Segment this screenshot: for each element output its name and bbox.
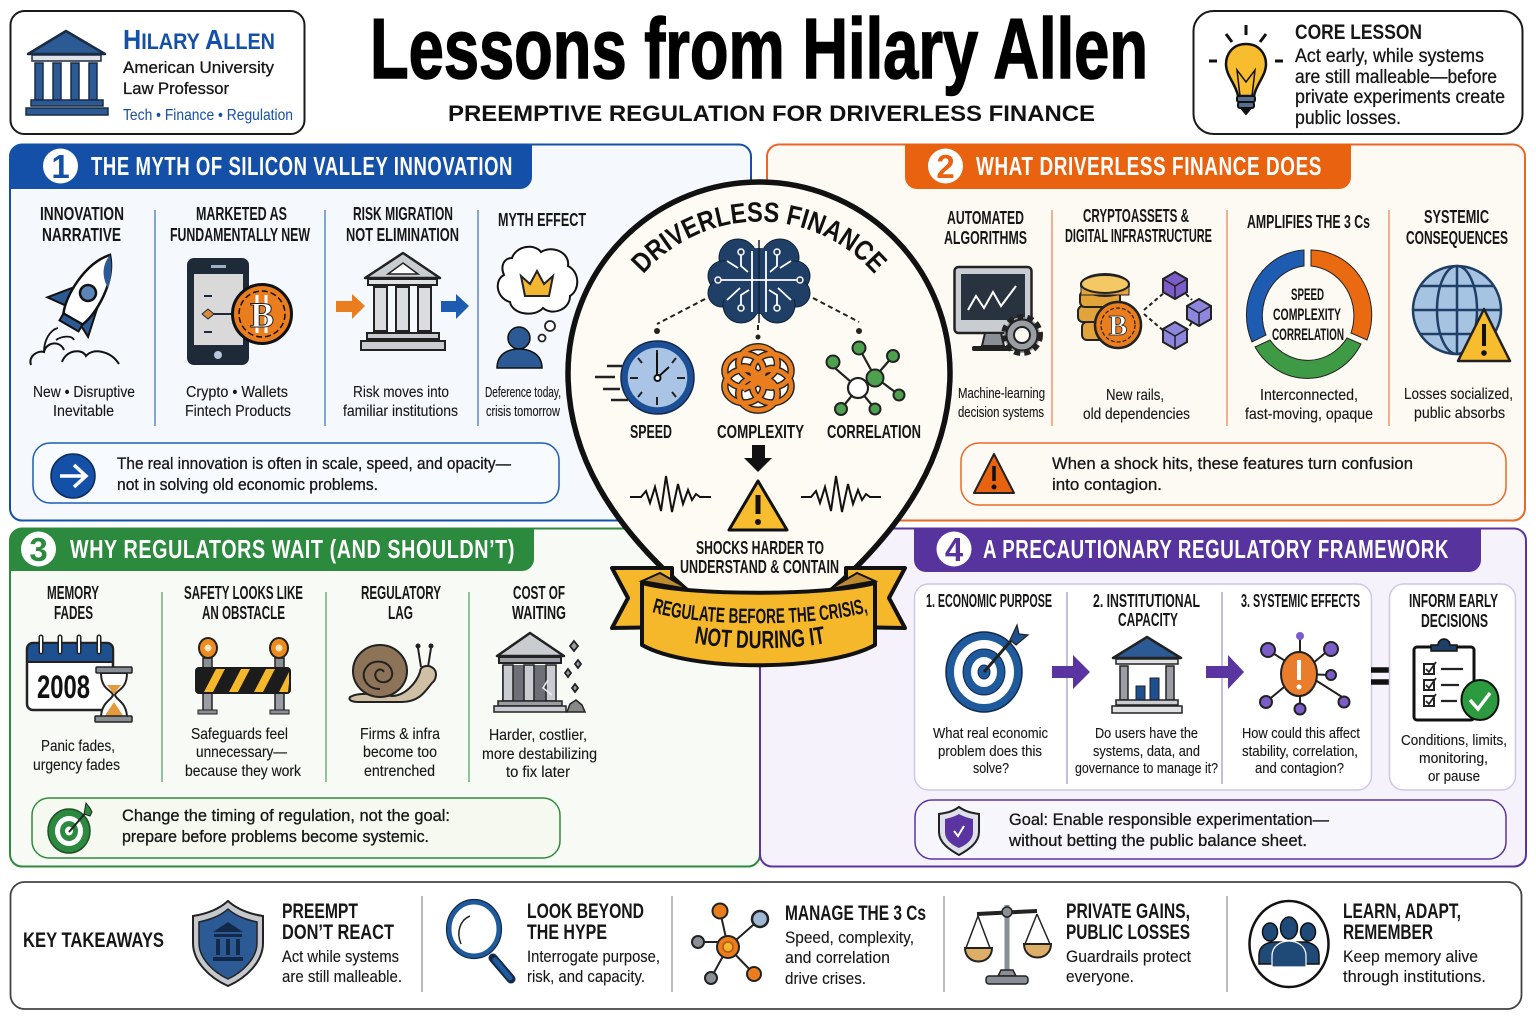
- column: myth effect: crisis tomorrow: [486, 404, 560, 420]
- step: economic purpose: problem does this: [938, 743, 1042, 760]
- column: innovation narrative: NARRATIVE: [42, 225, 121, 245]
- step: economic purpose: What real economic: [933, 725, 1048, 742]
- column: amplifies the 3 Cs: [1245, 212, 1373, 423]
- step: economic purpose: 1. ECONOMIC PURPOSE: [926, 591, 1052, 611]
- icon: snail: [349, 644, 436, 702]
- arrow: down to warning: [744, 445, 772, 472]
- takeaway: look beyond the hype: THE HYPE: [527, 921, 607, 944]
- column: cost of waiting: more destabilizing: [482, 746, 597, 763]
- chart: 3 Cs donut: CORRELATION: [1272, 325, 1344, 344]
- icon: green target: [48, 803, 92, 853]
- takeaway: learn adapt remember: through institutions.: [1343, 967, 1486, 986]
- key takeaways label: KEY TAKEAWAYS: [23, 929, 164, 952]
- author topics: Tech • Finance • Regulation: [123, 107, 293, 124]
- subtitle: PREEMPTIVE REGULATION FOR DRIVERLESS FINANCE: [448, 101, 1095, 126]
- column: regulatory lag: become too: [363, 744, 437, 761]
- column: automated algorithms: decision systems: [958, 405, 1044, 421]
- box: inform early decisions: Conditions, limits,: [1401, 732, 1507, 749]
- takeaway: manage the 3 Cs: [692, 902, 926, 988]
- step: economic purpose: [926, 591, 1052, 777]
- takeaway: private gains public losses: Guardrails protect: [1066, 947, 1191, 966]
- author role: [123, 58, 274, 98]
- icon: coins and blocks: [1078, 272, 1211, 349]
- icon: speed clock: [595, 341, 694, 414]
- column: risk migration: RISK MIGRATION: [353, 204, 453, 224]
- core lesson text: Act early, while systems: [1295, 46, 1484, 67]
- takeaway: private gains public losses: PUBLIC LOSSES: [1066, 921, 1190, 944]
- column: systemic consequences: [1404, 207, 1513, 422]
- panel 1 header: [10, 144, 532, 189]
- arrow: step 2 to 3: [1206, 655, 1244, 689]
- step: systemic effects: stability, correlation,: [1242, 743, 1358, 760]
- column: marketed as new: FUNDAMENTALLY NEW: [170, 225, 310, 245]
- panel: 1 the myth of silicon valley innovation: [10, 144, 751, 520]
- takeaway: look beyond the hype: LOOK BEYOND: [527, 900, 644, 923]
- column: automated algorithms: AUTOMATED: [947, 208, 1024, 228]
- icon: correlation network: [826, 342, 904, 415]
- column: cryptoassets: DIGITAL INFRASTRUCTURE: [1065, 226, 1212, 246]
- takeaway: manage the 3 Cs: drive crises.: [785, 969, 866, 988]
- icon: light bulb: [1209, 25, 1283, 114]
- step: institutional capacity: governance to manage it?: [1075, 760, 1218, 777]
- column: safety looks like an obstacle: [184, 583, 303, 780]
- icon: bank with bar chart: [1112, 637, 1182, 713]
- icon: clipboard with check: [1414, 639, 1498, 720]
- column: systemic consequences: public absorbs: [1414, 405, 1505, 422]
- icon: coins and blocks: B: [1109, 311, 1127, 342]
- column: safety looks like an obstacle: SAFETY LOOKS LIKE: [184, 583, 303, 603]
- callout: change the timing: [32, 798, 560, 858]
- step: institutional capacity: CAPACITY: [1118, 610, 1178, 630]
- banner: regulate before the crisis: REGULATE BEFORE THE CRISIS,: [652, 598, 868, 624]
- takeaway: learn adapt remember: [1250, 900, 1486, 987]
- column: regulatory lag: LAG: [388, 603, 413, 623]
- column: marketed as new: Fintech Products: [185, 403, 291, 420]
- column: innovation narrative: [30, 204, 135, 420]
- panel: 3 why regulators wait: [10, 528, 760, 866]
- icon: purple shield: [939, 807, 979, 855]
- takeaway: learn adapt remember: Keep memory alive: [1343, 947, 1478, 966]
- panel 1 header: 1: [51, 148, 70, 185]
- step: institutional capacity: systems, data, and: [1093, 743, 1200, 760]
- framework steps box: [914, 584, 1372, 790]
- core lesson text: public losses.: [1295, 108, 1401, 129]
- step: systemic effects: How could this affect: [1242, 725, 1361, 742]
- shocks text: [680, 538, 839, 577]
- column: safety looks like an obstacle: AN OBSTACLE: [202, 603, 285, 623]
- column: marketed as new: [170, 204, 310, 420]
- arrow: step 1 to 2: [1052, 655, 1090, 689]
- center heading: DRIVERLESS FINANCE: [630, 202, 888, 274]
- takeaway: private gains public losses: everyone.: [1066, 967, 1134, 986]
- callout: shock contagion: into contagion.: [1052, 475, 1162, 494]
- icon: calendar and hourglass: [27, 637, 132, 722]
- center labels: SPEED: [630, 422, 672, 442]
- column: regulatory lag: [349, 583, 441, 780]
- center labels: CORRELATION: [827, 422, 921, 442]
- icon: magnifying glass: [446, 900, 511, 979]
- column: systemic consequences: Losses socialized,: [1404, 386, 1513, 403]
- takeaway: look beyond the hype: risk, and capacity.: [527, 967, 645, 986]
- callout: goal: without betting the public balance sheet.: [1008, 831, 1307, 850]
- callout: change the timing: prepare before problems become systemic.: [122, 827, 429, 846]
- core lesson text: are still malleable—before: [1295, 67, 1497, 88]
- step: institutional capacity: Do users have the: [1095, 725, 1198, 742]
- column: automated algorithms: Machine-learning: [958, 386, 1045, 402]
- icon: phone with bitcoin: [187, 258, 292, 365]
- takeaway: preempt: DON’T REACT: [282, 921, 394, 944]
- panel: key takeaways: [10, 882, 1522, 1009]
- column: cost of waiting: [482, 583, 597, 781]
- takeaway: preempt: Act while systems: [282, 947, 399, 966]
- icon: monitor with gear: [954, 267, 1040, 353]
- takeaway: manage the 3 Cs: MANAGE THE 3 Cs: [785, 902, 926, 925]
- callout: goal: [915, 800, 1506, 859]
- step: institutional capacity: [1075, 591, 1218, 777]
- callout: real innovation: [33, 443, 559, 503]
- column: myth effect: [485, 210, 586, 420]
- chart: 3 Cs donut: [1246, 250, 1372, 378]
- box: inform early decisions: [1390, 584, 1516, 790]
- takeaway: manage the 3 Cs: Speed, complexity,: [785, 928, 914, 947]
- icon: calendar and hourglass: 2008: [37, 669, 90, 705]
- panel 3 header: WHY REGULATORS WAIT (AND SHOULDN’T): [70, 534, 515, 564]
- icon: crumbling bank: [494, 633, 585, 712]
- icon: institution building: [26, 31, 108, 115]
- column: cryptoassets: [1065, 206, 1212, 423]
- column: safety looks like an obstacle: because they work: [185, 763, 302, 780]
- icon: bank with flow arrows: [336, 253, 469, 350]
- column: innovation narrative: Inevitable: [53, 403, 114, 420]
- author role: Law Professor: [123, 79, 229, 98]
- column: automated algorithms: ALGORITHMS: [944, 228, 1027, 248]
- icon: bank shield: [193, 901, 263, 986]
- box: inform early decisions: monitoring,: [1419, 750, 1488, 767]
- icon: orange network: [692, 904, 768, 984]
- column: memory fades: MEMORY: [47, 583, 99, 603]
- takeaway: learn adapt remember: LEARN, ADAPT,: [1343, 900, 1461, 923]
- step: systemic effects: [1241, 591, 1361, 777]
- chart: 3 Cs donut: COMPLEXITY: [1273, 305, 1341, 324]
- panel 4 header: [914, 528, 1481, 572]
- banner: regulate before the crisis: NOT DURING IT: [695, 626, 824, 648]
- panel: 4 a precautionary regulatory framework: [760, 528, 1526, 866]
- panel 3 header: [10, 528, 534, 571]
- takeaway: private gains public losses: PRIVATE GAINS,: [1066, 900, 1190, 923]
- shocks text: UNDERSTAND & CONTAIN: [680, 557, 839, 577]
- takeaway: private gains public losses: [965, 900, 1191, 986]
- title: Lessons from Hilary Allen: [370, 2, 1148, 97]
- column: innovation narrative: INNOVATION: [40, 204, 124, 224]
- panel: core lesson: [1194, 11, 1522, 134]
- panel 2 header: 2: [936, 148, 955, 185]
- column: cryptoassets: CRYPTOASSETS &: [1083, 206, 1189, 226]
- column: risk migration: [336, 204, 469, 420]
- icon: target with arrow: [946, 625, 1028, 712]
- takeaway: preempt: PREEMPT: [282, 900, 358, 923]
- takeaway: look beyond the hype: [446, 900, 660, 986]
- panel: central driverless finance balloon: [565, 179, 953, 668]
- column: myth effect: MYTH EFFECT: [498, 210, 586, 230]
- takeaway: learn adapt remember: REMEMBER: [1343, 921, 1433, 944]
- panel: author card: [10, 11, 304, 134]
- column: memory fades: Panic fades,: [41, 738, 115, 755]
- takeaway: preempt: [193, 900, 402, 986]
- takeaway: preempt: are still malleable.: [282, 967, 402, 986]
- box: inform early decisions: or pause: [1428, 768, 1480, 785]
- column: cryptoassets: old dependencies: [1083, 406, 1190, 423]
- column: regulatory lag: Firms & infra: [360, 726, 440, 743]
- column: regulatory lag: entrenched: [364, 763, 435, 780]
- banner: regulate before the crisis: [610, 566, 908, 668]
- column: automated algorithms: [944, 208, 1045, 421]
- icon: shock waves: [630, 476, 881, 512]
- author name: HILARY ALLEN: [123, 24, 275, 55]
- step: economic purpose: solve?: [973, 760, 1009, 777]
- column: risk migration: Risk moves into: [353, 384, 449, 401]
- column: memory fades: FADES: [54, 603, 93, 623]
- column: systemic consequences: SYSTEMIC: [1424, 207, 1489, 227]
- panel: 2 what driverless finance does: [767, 144, 1525, 520]
- panel 1 header: THE MYTH OF SILICON VALLEY INNOVATION: [91, 151, 513, 181]
- column: myth effect: Deference today,: [485, 385, 561, 401]
- icon: thought cloud and person: [497, 247, 577, 368]
- icon: road barrier: [195, 638, 291, 714]
- column: cost of waiting: COST OF: [513, 583, 565, 603]
- column: risk migration: NOT ELIMINATION: [346, 225, 459, 245]
- core lesson text: private experiments create: [1295, 87, 1505, 108]
- core lesson text: [1295, 21, 1505, 129]
- icon: globe with warning: [1413, 266, 1510, 361]
- callout: real innovation: The real innovation is often in scale, speed, and opacity—: [117, 454, 511, 473]
- callout: goal: Goal: Enable responsible experimentation—: [1009, 810, 1329, 829]
- icon: people circle: [1250, 901, 1328, 987]
- dashed connectors: [654, 298, 862, 340]
- panel 2 header: [905, 144, 1351, 189]
- icon: rocket: [30, 238, 129, 365]
- step: systemic effects: 3. SYSTEMIC EFFECTS: [1241, 591, 1360, 611]
- callout: shock contagion: When a shock hits, these features turn confusion: [1052, 454, 1413, 473]
- column: memory fades: [27, 583, 132, 774]
- takeaway: manage the 3 Cs: and correlation: [785, 948, 890, 967]
- equals sign: [1371, 670, 1391, 682]
- column: marketed as new: MARKETED AS: [196, 204, 287, 224]
- step: systemic effects: and contagion?: [1255, 760, 1344, 777]
- column: innovation narrative: New • Disruptive: [33, 384, 135, 401]
- callout: shock contagion: [961, 443, 1506, 505]
- column: marketed as new: Crypto • Wallets: [186, 384, 288, 401]
- panel 2 header: WHAT DRIVERLESS FINANCE DOES: [976, 151, 1322, 181]
- chart: 3 Cs donut: SPEED: [1291, 285, 1324, 304]
- icon: phone with bitcoin: B: [250, 295, 274, 335]
- column: cost of waiting: Harder, costlier,: [489, 727, 587, 744]
- core lesson text: CORE LESSON: [1295, 21, 1422, 44]
- column: cryptoassets: New rails,: [1106, 387, 1164, 404]
- icon: warning triangle: [729, 481, 787, 530]
- center labels: COMPLEXITY: [717, 422, 804, 442]
- icon: balance scales: [965, 905, 1051, 984]
- column: memory fades: urgency fades: [33, 757, 120, 774]
- column: cost of waiting: WAITING: [512, 603, 566, 623]
- author role: American University: [123, 58, 274, 77]
- shocks text: SHOCKS HARDER TO: [696, 538, 824, 558]
- box: inform early decisions: DECISIONS: [1421, 611, 1488, 631]
- column: amplifies the 3 Cs: Interconnected,: [1260, 387, 1358, 404]
- center labels: [630, 422, 921, 442]
- icon: complexity knot: [725, 347, 791, 410]
- column: amplifies the 3 Cs: AMPLIFIES THE 3 Cs: [1247, 212, 1370, 232]
- icon: risk network: [1260, 632, 1350, 714]
- callout: real innovation: not in solving old economic problems.: [117, 475, 378, 494]
- column: cost of waiting: to fix later: [506, 764, 571, 781]
- panel 4 header: 4: [945, 531, 964, 568]
- panel 3 header: 3: [29, 531, 48, 568]
- callout: change the timing: Change the timing of regulation, not the goal:: [122, 806, 450, 825]
- column: amplifies the 3 Cs: fast-moving, opaque: [1245, 406, 1373, 423]
- icon: brain circuit: [708, 239, 810, 323]
- step: institutional capacity: 2. INSTITUTIONAL: [1093, 591, 1200, 611]
- column: regulatory lag: REGULATORY: [361, 583, 441, 603]
- column: safety looks like an obstacle: Safeguards feel: [191, 726, 288, 743]
- column: risk migration: familiar institutions: [343, 403, 458, 420]
- column: safety looks like an obstacle: unnecessary—: [196, 744, 287, 761]
- takeaway: look beyond the hype: Interrogate purpose,: [527, 947, 660, 966]
